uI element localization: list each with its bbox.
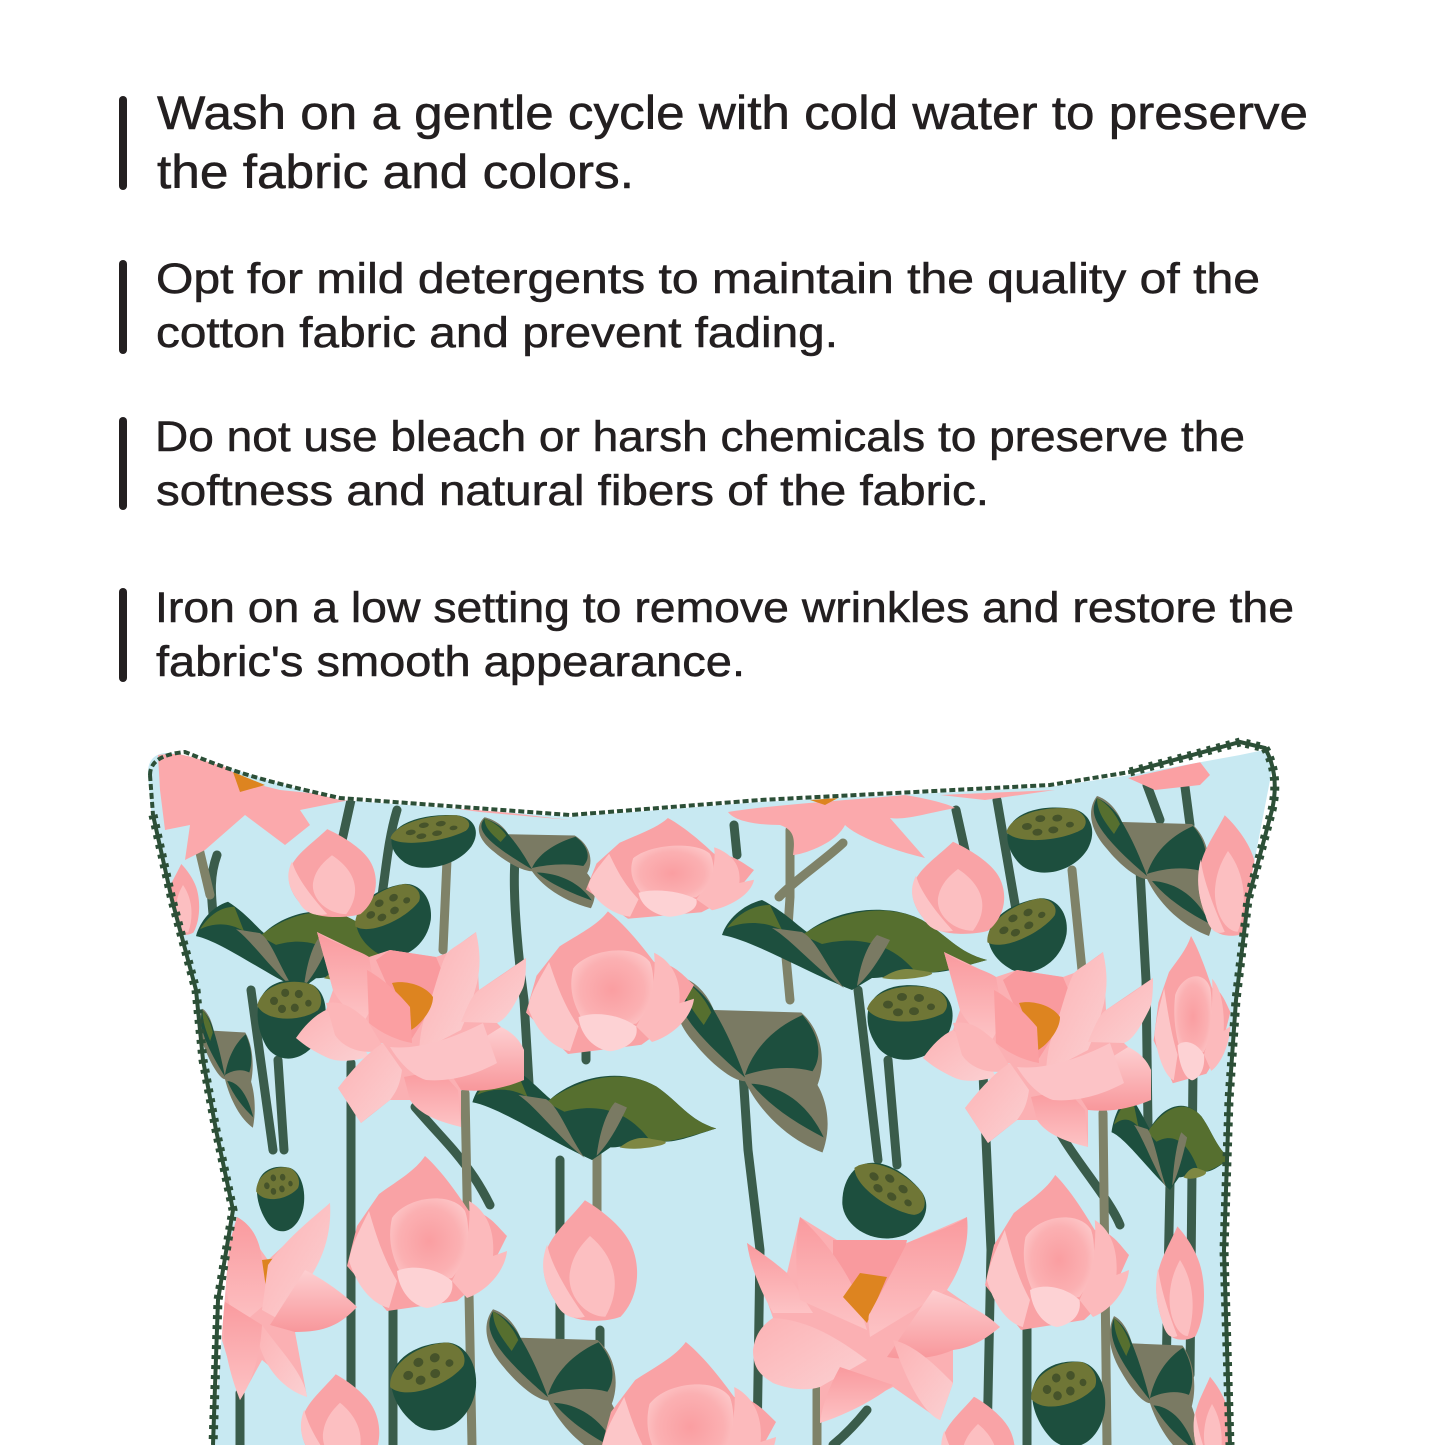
open lotus bottom centre xyxy=(747,1217,1000,1423)
divider bar 2 xyxy=(119,260,127,354)
seed pods xyxy=(253,804,1116,1445)
pillow photo xyxy=(148,742,1275,1445)
instruction 1 text xyxy=(157,86,1308,198)
lotus buds xyxy=(167,815,1258,1445)
care instruction 1 xyxy=(119,86,1308,198)
care instruction 2 xyxy=(119,255,1260,357)
care instruction 4 xyxy=(119,584,1294,686)
fan leaf, top right xyxy=(1091,796,1213,936)
instruction 1 text: the fabric and colors. xyxy=(157,145,634,198)
lace: left and right core xyxy=(153,742,1275,1445)
lace: left and right scallops xyxy=(153,742,1275,1445)
divider bar 3 xyxy=(119,417,127,510)
fan leaf, left edge xyxy=(200,1009,255,1128)
fan leaf, bottom xyxy=(486,1309,621,1445)
instruction 3 text: softness and natural fibers of the fabric. xyxy=(156,467,989,515)
fan leaf, top xyxy=(479,817,595,908)
pillow body xyxy=(148,750,1272,1445)
instruction 2 text: cotton fabric and prevent fading. xyxy=(156,309,838,357)
crochet lace edge xyxy=(150,742,1275,1445)
leaves xyxy=(196,796,1231,1445)
divider bar 1 xyxy=(119,96,127,190)
instruction 2 text xyxy=(156,255,1260,357)
wide leaf, right edge xyxy=(1112,1105,1226,1190)
rounded lotus blooms xyxy=(347,818,1230,1445)
stems xyxy=(197,785,1193,1445)
fan leaf, centre xyxy=(675,978,828,1152)
wide leaf, upper centre xyxy=(722,900,987,990)
lotus at top centre xyxy=(728,762,1210,858)
open lotus left edge xyxy=(222,1203,357,1400)
open lotus blooms xyxy=(158,754,1210,1423)
instruction 3 text: Do not use bleach or harsh chemicals to preserve the xyxy=(155,413,1245,461)
open lotus left xyxy=(296,932,526,1127)
instruction 4 text: Iron on a low setting to remove wrinkles and restore the xyxy=(155,584,1294,632)
instruction 4 text xyxy=(155,584,1294,686)
lotus at top left corner xyxy=(158,754,570,860)
pillow print xyxy=(158,754,1258,1445)
instruction 1 text: Wash on a gentle cycle with cold water to preserve xyxy=(157,86,1308,139)
lace: top edge xyxy=(150,752,1130,815)
instruction 2 text: Opt for mild detergents to maintain the quality of the xyxy=(156,255,1260,303)
instruction 4 text: fabric's smooth appearance. xyxy=(156,638,745,686)
fan leaf, bottom right xyxy=(1110,1316,1198,1445)
care instruction 3 xyxy=(119,413,1245,515)
wide leaf, centre xyxy=(472,1076,716,1160)
wide leaf with pod, upper left xyxy=(196,902,379,984)
open lotus right xyxy=(923,952,1153,1147)
instruction 3 text xyxy=(155,413,1245,515)
divider bar 4 xyxy=(119,588,127,682)
